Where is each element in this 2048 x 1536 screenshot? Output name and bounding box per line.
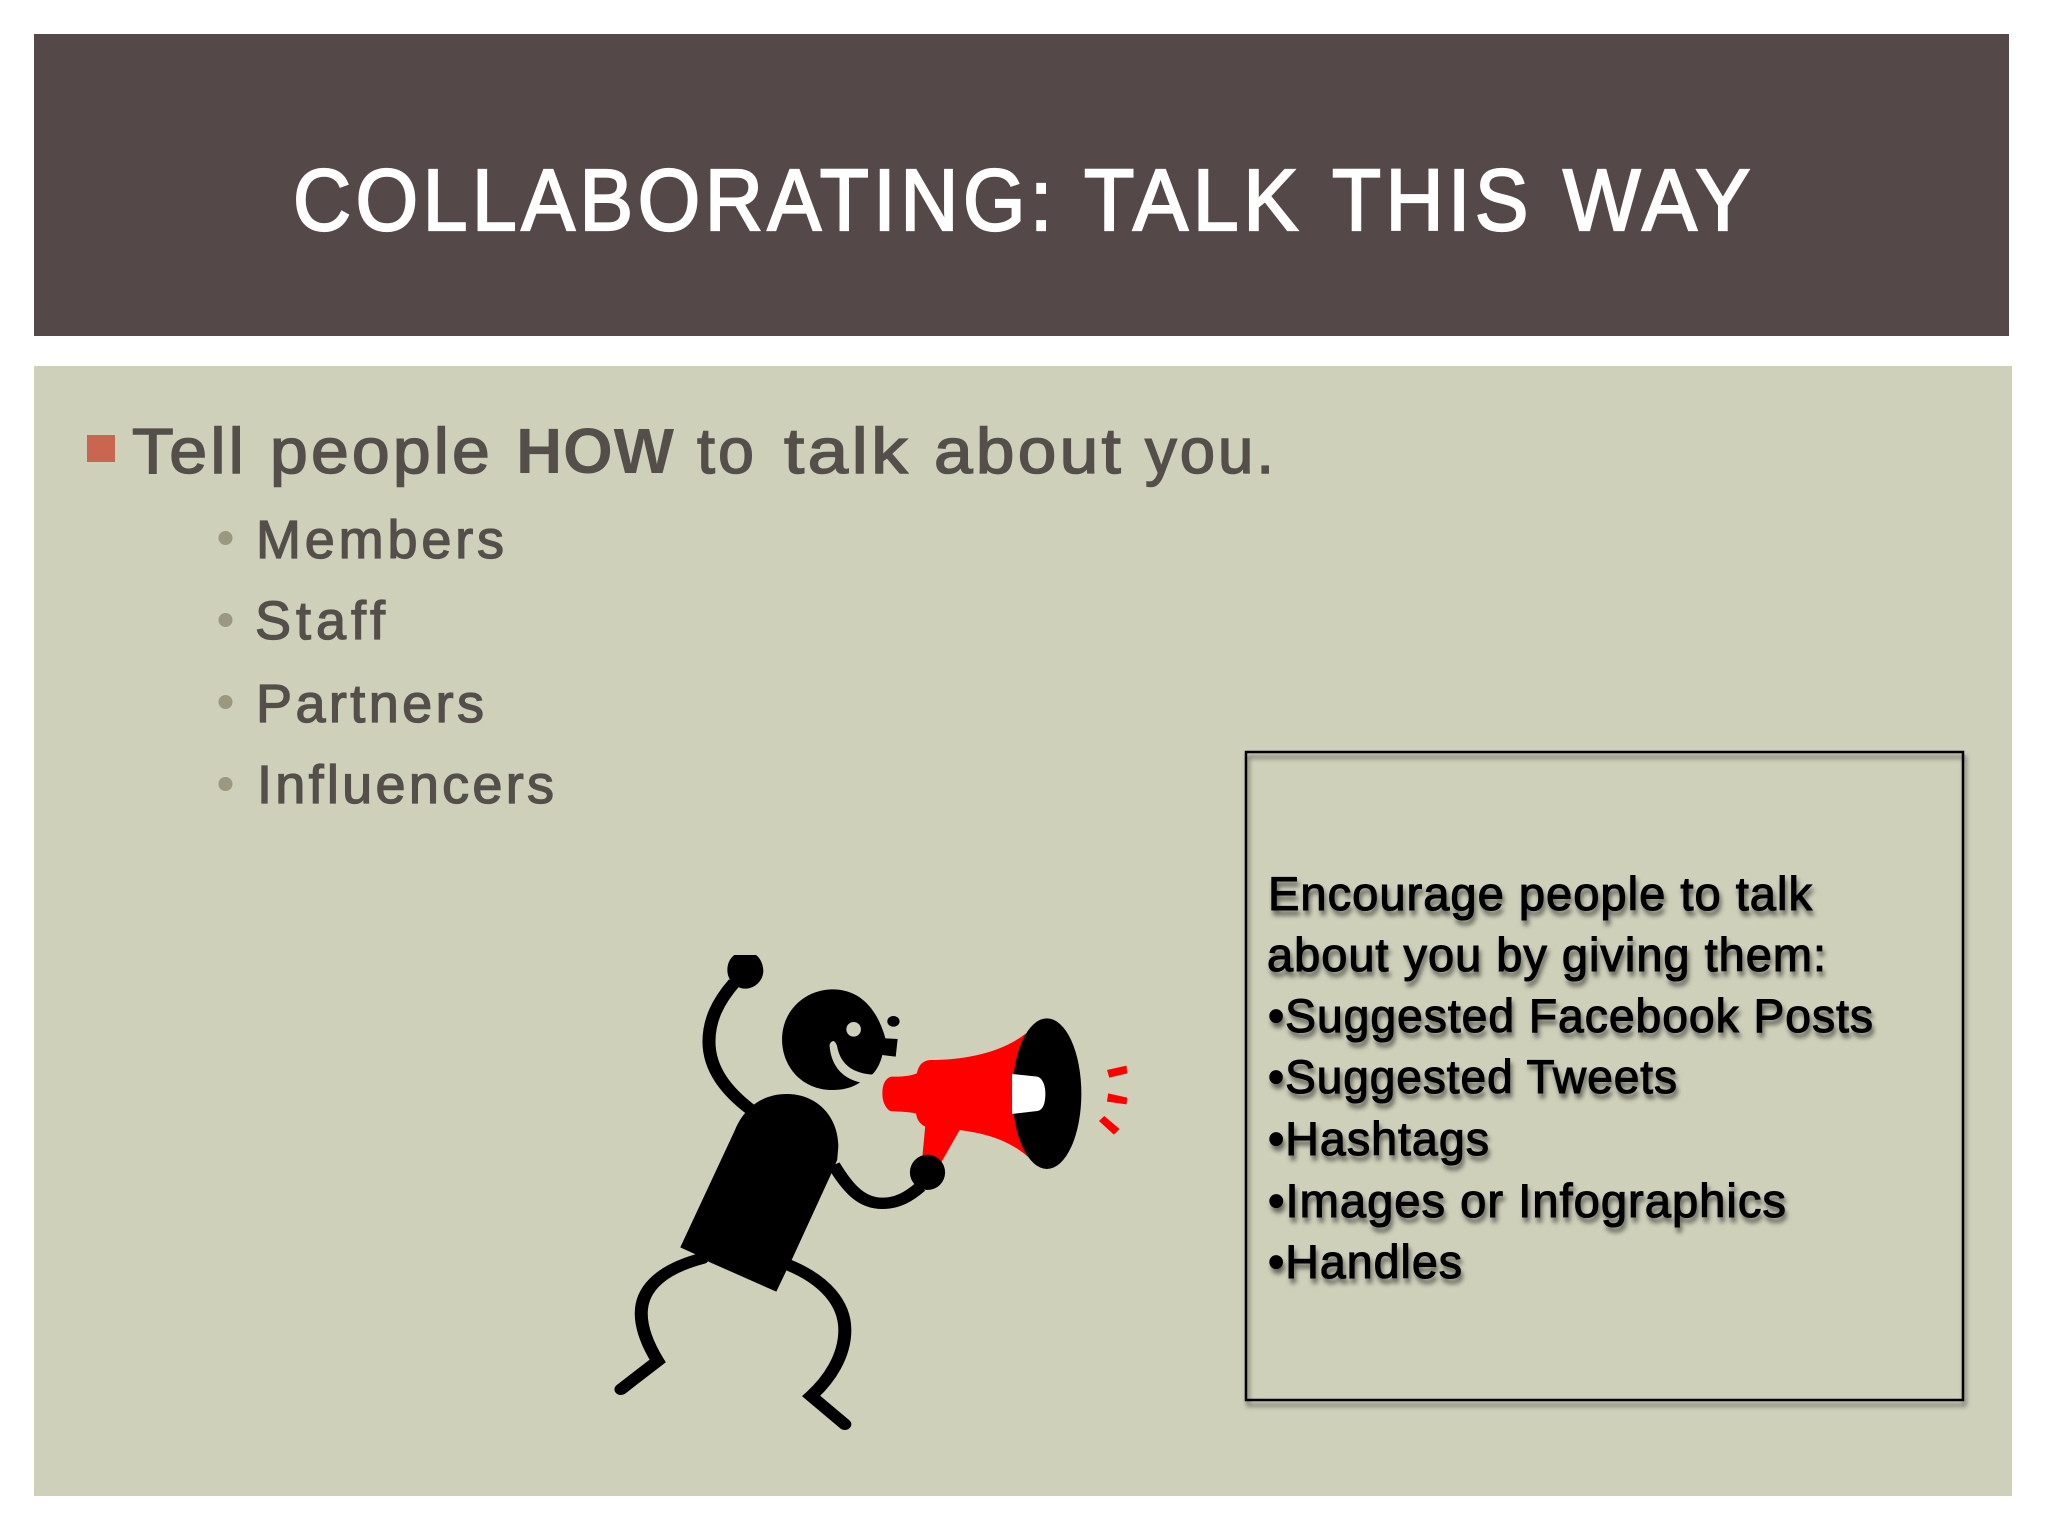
callout text: •Suggested Facebook Posts (1268, 989, 1874, 1042)
callout text: •Images or Infographics (1268, 1174, 1787, 1227)
icon: lower arm and fist (834, 1155, 945, 1203)
icon: body (680, 1094, 838, 1292)
main bullet line: you. (1145, 415, 1277, 487)
callout text: •Suggested Tweets (1268, 1050, 1678, 1103)
main bullet line: about (934, 415, 1124, 487)
icon: legs (621, 1258, 845, 1424)
icon: sound rays (1099, 1066, 1127, 1135)
main bullet line: people (270, 415, 493, 487)
sub-bullet list: Partners (256, 674, 484, 734)
main bullet line: Tell (132, 415, 247, 487)
icon: raised arm (709, 955, 763, 1109)
main bullet line: to (697, 415, 757, 487)
callout text (1267, 867, 1874, 1288)
sub-bullet list: Staff (255, 591, 386, 651)
sub-bullet list: Members (256, 510, 504, 570)
sub-bullet list (218, 510, 554, 815)
title: THIS (1332, 152, 1533, 249)
callout text: Encourage people to talk (1268, 867, 1813, 920)
callout text: •Handles (1268, 1235, 1463, 1288)
main bullet line (87, 415, 1277, 487)
main bullet line: talk (784, 415, 911, 487)
callout box (1246, 752, 1963, 1400)
callout text: •Hashtags (1268, 1112, 1490, 1165)
title (293, 152, 1755, 249)
sub-bullet list: Influencers (257, 755, 554, 815)
title: COLLABORATING: (293, 152, 1057, 249)
title: TALK (1084, 152, 1303, 249)
panel: content (34, 366, 2012, 1496)
icon: megaphone (882, 1018, 1081, 1169)
icon: figure shouting through a megaphone (621, 955, 1127, 1424)
title: WAY (1563, 152, 1755, 249)
header band (34, 34, 2009, 336)
callout text: about you by giving them: (1267, 928, 1827, 981)
icon: head (782, 989, 900, 1090)
main bullet line: HOW (516, 415, 675, 487)
